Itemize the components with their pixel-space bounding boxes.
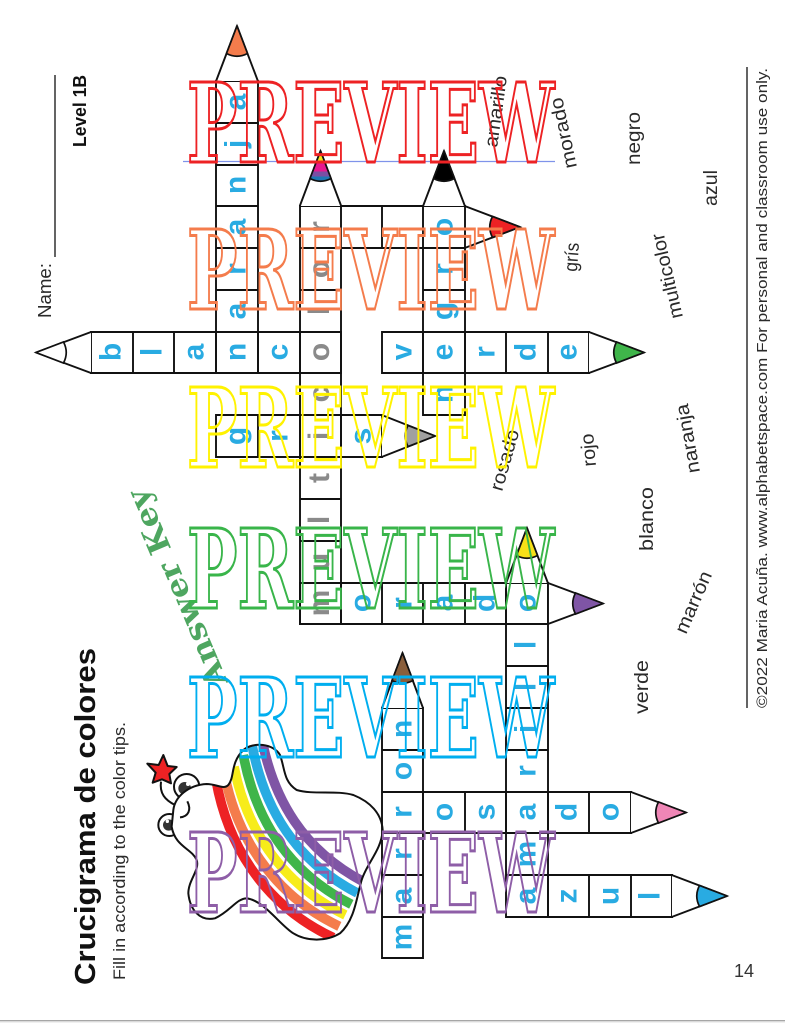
page number: 14 (734, 961, 754, 981)
letters: l (634, 892, 666, 900)
word: marrón: marrón (671, 568, 717, 637)
watermark: preview blue: PREVIEW (187, 654, 556, 784)
letters: o (386, 762, 418, 780)
watermark: preview yellow: PREVIEW (187, 364, 556, 494)
letters (426, 803, 626, 821)
word: rosado: rosado (487, 427, 524, 493)
answer key stamp: Answer Key (120, 482, 236, 694)
letters: i (303, 432, 336, 440)
letters: l (510, 683, 542, 691)
word: naranja: naranja (672, 402, 705, 475)
word: multicolor (300, 151, 341, 624)
instructions: Fill in according to the color tips. (110, 722, 129, 980)
letters: r (386, 806, 418, 818)
word: amarillo: amarillo (481, 74, 512, 149)
cells (91, 332, 341, 373)
cells (300, 206, 341, 624)
pencil tip orange (216, 26, 258, 81)
pencil tip yellow (506, 528, 548, 583)
letters (386, 343, 584, 361)
letters: o (592, 803, 626, 821)
title: Crucigrama de colores (70, 648, 102, 985)
word: blanco (36, 332, 341, 373)
word: rojo: rojo (577, 433, 601, 467)
word: azul: azul (701, 170, 722, 206)
letters: a (178, 343, 210, 360)
letters: o (303, 260, 336, 278)
letters: i (510, 725, 542, 733)
letters: a (220, 93, 252, 110)
letters: a (510, 803, 542, 820)
letters: o (510, 594, 542, 612)
letters: s (344, 428, 378, 444)
pencil tip purple (548, 583, 603, 624)
letters: n (220, 176, 252, 194)
pencil tip green (589, 332, 644, 373)
letters: o (344, 594, 378, 612)
letters: g (426, 302, 460, 320)
letters: d (550, 803, 584, 821)
word: gris: grís (561, 242, 584, 272)
word: verde: verde (632, 660, 653, 714)
letters (220, 93, 252, 319)
word: gris (216, 415, 435, 457)
cells (423, 206, 465, 415)
letters: v (386, 343, 418, 360)
letters: j (220, 140, 252, 149)
letters: o (303, 343, 336, 361)
letters (426, 218, 460, 403)
letters: l (136, 348, 168, 356)
letters: r (262, 430, 294, 442)
pencil tip blue (672, 875, 727, 917)
letters: l (303, 307, 336, 315)
letters: r (468, 346, 502, 358)
letters: g (220, 427, 252, 445)
letters: o (426, 218, 460, 236)
footer copyright: ©2022 Maria Acuña. www.alphabetspace.com For personal and classroom use only. (754, 68, 771, 708)
letters: a (220, 218, 252, 235)
word: negro (423, 151, 465, 415)
cells (216, 415, 382, 457)
letters: d (510, 343, 542, 361)
letters (220, 427, 378, 445)
smile (180, 801, 189, 817)
letters: a (220, 302, 252, 319)
name field: Name: (35, 263, 55, 318)
word: morado: morado (546, 96, 582, 170)
letters: r (426, 263, 460, 275)
cells (216, 81, 258, 373)
cells (506, 583, 548, 917)
cloud outline (172, 745, 383, 940)
watermark: preview green: PREVIEW (187, 505, 556, 635)
letters (510, 641, 542, 904)
letters: n (426, 385, 460, 403)
letters: m (510, 841, 542, 867)
watermark: preview purple: PREVIEW (187, 809, 556, 939)
letters: b (94, 343, 128, 361)
cells (382, 708, 423, 958)
letters: e (426, 344, 460, 360)
letters (386, 720, 418, 950)
word: amarillo (506, 528, 548, 917)
pencil tip pink (631, 792, 686, 833)
word: multicolor: multicolor (648, 230, 688, 321)
pencil tip rainbow (300, 151, 341, 206)
word: verde (382, 332, 644, 373)
letters: r (386, 848, 418, 860)
letters: a (510, 887, 542, 904)
pencil tip white (36, 332, 91, 373)
pencil tip brown (382, 653, 423, 708)
letters: r (303, 221, 336, 233)
word: blanco: blanco (637, 487, 658, 551)
letters (550, 887, 666, 905)
letters: d (468, 594, 502, 612)
letters: z (550, 888, 584, 904)
letters: o (426, 803, 460, 821)
rainbow bands (216, 737, 363, 938)
letters: a (426, 594, 460, 611)
eyes (158, 774, 199, 836)
letters (303, 221, 336, 616)
cloud fill (172, 745, 383, 940)
antenna (161, 782, 175, 805)
word bank (481, 74, 722, 714)
word: marrón (382, 653, 423, 958)
level label: Level 1B (70, 75, 90, 147)
letters: n (386, 720, 418, 738)
cells (548, 875, 672, 917)
word: morado (300, 583, 603, 624)
letters (94, 343, 294, 361)
cells (382, 332, 589, 373)
illustration: rainbow cloud with star (147, 737, 383, 940)
word: naranja (216, 26, 258, 373)
letters: c (262, 344, 294, 360)
letters: r (510, 765, 542, 777)
letters: t (303, 473, 336, 483)
letters: a (386, 887, 418, 904)
pencil tip red (465, 206, 520, 248)
letters: s (468, 804, 502, 820)
letters: n (220, 343, 252, 361)
letters: r (386, 597, 418, 609)
word: negro: negro (624, 112, 645, 165)
letters: l (510, 641, 542, 649)
letters: c (303, 386, 336, 402)
pencil tip black (423, 151, 465, 206)
letters: e (550, 344, 584, 360)
letters: r (220, 263, 252, 275)
pencil tip gray (382, 415, 435, 457)
letters: u (303, 553, 336, 571)
word: rojo (341, 206, 520, 248)
watermark: preview orange: PREVIEW (187, 206, 556, 336)
cells (341, 206, 465, 248)
watermark: preview red: PREVIEW (187, 59, 556, 189)
guide line (183, 160, 555, 162)
word: rosado (423, 792, 686, 833)
letters: m (303, 590, 336, 616)
letters: u (592, 887, 626, 905)
letters (344, 594, 542, 612)
cells (300, 583, 548, 624)
page bottom edge (0, 1020, 785, 1023)
cells (423, 792, 631, 833)
star (147, 755, 177, 783)
word: azul (548, 875, 727, 917)
letters: m (386, 924, 418, 950)
letters: l (303, 516, 336, 524)
